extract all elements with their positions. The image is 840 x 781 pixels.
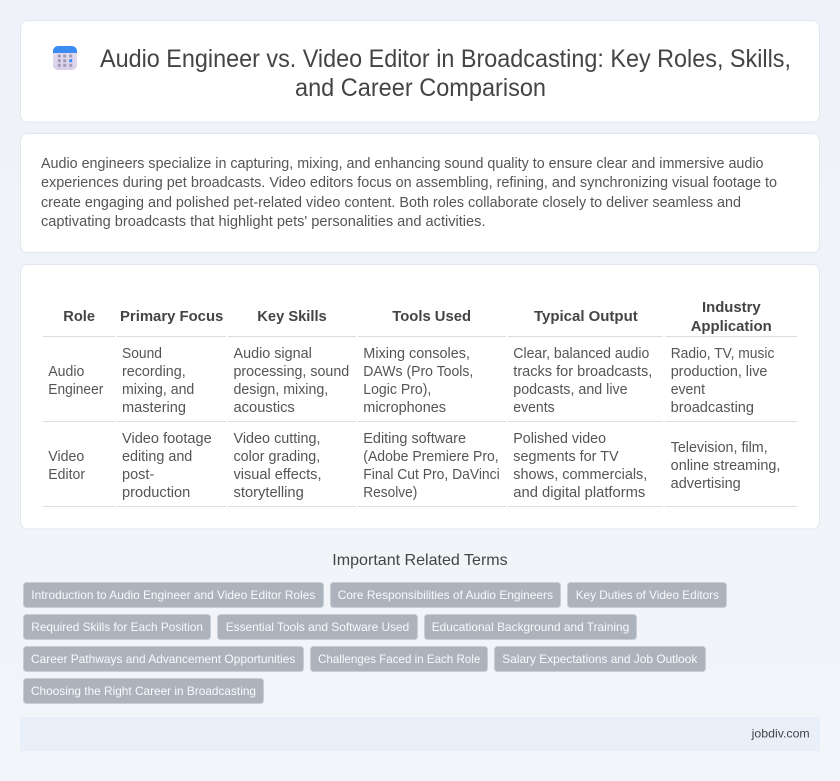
table row: audio engineer: events bbox=[513, 400, 555, 416]
table row: audio engineer: event bbox=[671, 382, 705, 398]
table row: audio engineer: production, live bbox=[671, 364, 767, 380]
icon: calendar bbox=[53, 46, 77, 70]
table row: video editor: visual effects, bbox=[234, 467, 322, 483]
table row: audio engineer: Logic Pro), bbox=[363, 382, 431, 398]
table row: video editor: segments for TV bbox=[513, 449, 619, 465]
table row: video editor: editing and bbox=[122, 449, 192, 465]
tag bbox=[494, 646, 706, 672]
table row: audio engineer: Engineer bbox=[48, 382, 103, 398]
table header row: Tools Used bbox=[392, 308, 471, 325]
panel: introduction bbox=[20, 134, 820, 252]
tag bbox=[24, 582, 324, 608]
table row: video editor: (Adobe Premiere Pro, bbox=[363, 449, 499, 465]
tag: Educational Background and Training bbox=[432, 620, 629, 634]
table row: video editor: advertising bbox=[671, 476, 741, 492]
table row: audio engineer: Mixing consoles, bbox=[363, 346, 470, 362]
table row: audio engineer: mixing, and bbox=[122, 382, 194, 398]
table row: audio engineer: podcasts, and live bbox=[513, 382, 628, 398]
table row: audio engineer: tracks for broadcasts, bbox=[513, 364, 652, 380]
table row: video editor: color grading, bbox=[234, 449, 320, 465]
intro paragraph: experiences during pet broadcasts. Video editors focus on assembling, refining, and synchronizing visual footage to bbox=[41, 175, 777, 191]
intro paragraph: Audio engineers specialize in capturing, mixing, and enhancing sound quality to ensure clear and immersive audio bbox=[41, 156, 764, 172]
table row: audio engineer: acoustics bbox=[234, 400, 295, 416]
table row: video editor: Resolve) bbox=[363, 485, 417, 501]
table header row: Key Skills bbox=[257, 308, 327, 325]
tag: Career Pathways and Advancement Opportunities bbox=[31, 652, 295, 666]
table row: video editor: Television, film, bbox=[671, 440, 768, 456]
table row: video editor bbox=[48, 431, 780, 501]
table row: video editor: Editing software bbox=[363, 431, 466, 447]
table header row: Application bbox=[691, 318, 772, 335]
table row: audio engineer: Clear, balanced audio bbox=[513, 346, 649, 362]
table row: audio engineer: DAWs (Pro Tools, bbox=[363, 364, 473, 380]
table row: audio engineer: Radio, TV, music bbox=[671, 346, 774, 362]
tag bbox=[218, 614, 418, 640]
table row: video editor: Editor bbox=[48, 467, 85, 483]
title: and Career Comparison bbox=[295, 74, 546, 102]
table row: video editor: Final Cut Pro, DaVinci bbox=[363, 467, 500, 483]
tag: Salary Expectations and Job Outlook bbox=[502, 652, 698, 666]
tag: Introduction to Audio Engineer and Video Editor Roles bbox=[31, 588, 315, 602]
title: Audio Engineer vs. Video Editor in Broadcasting: Key Roles, Skills, bbox=[100, 45, 791, 73]
table row: video editor: production bbox=[122, 485, 190, 501]
footer bar bbox=[20, 717, 820, 751]
table header row: Industry bbox=[702, 299, 761, 316]
table row: audio engineer: mastering bbox=[122, 400, 186, 416]
table row: video editor: shows, commercials, bbox=[513, 467, 647, 483]
table row: video editor: post- bbox=[122, 467, 155, 483]
related term tags bbox=[24, 582, 726, 704]
tag: Choosing the Right Career in Broadcasting bbox=[31, 684, 256, 698]
table row: audio engineer: Sound bbox=[122, 346, 162, 362]
table row: audio engineer: design, mixing, bbox=[234, 382, 328, 398]
table row: audio engineer: processing, sound bbox=[234, 364, 349, 380]
intro paragraph: create engaging and polished pet-related video content. Both roles collaborate closely to deliver seamless and bbox=[41, 195, 741, 211]
intro paragraph bbox=[41, 156, 777, 230]
tag bbox=[24, 678, 264, 704]
table row: audio engineer bbox=[48, 346, 774, 416]
tag bbox=[330, 582, 560, 608]
tag bbox=[24, 646, 304, 672]
tag bbox=[24, 614, 210, 640]
tag: Key Duties of Video Editors bbox=[576, 588, 719, 602]
tag: Essential Tools and Software Used bbox=[226, 620, 409, 634]
table row: video editor: Video bbox=[48, 449, 84, 465]
table row: video editor: Polished video bbox=[513, 431, 606, 447]
table header row: Primary Focus bbox=[120, 308, 223, 325]
table row: audio engineer: recording, bbox=[122, 364, 186, 380]
table header row: Typical Output bbox=[534, 308, 638, 325]
heading: important related terms: Important Related Terms bbox=[332, 552, 508, 569]
table row: audio engineer: Audio signal bbox=[234, 346, 312, 362]
table row: video editor: storytelling bbox=[234, 485, 304, 501]
table row: audio engineer: broadcasting bbox=[671, 400, 754, 416]
tag bbox=[424, 614, 636, 640]
table row: video editor: Video cutting, bbox=[234, 431, 320, 447]
tag: Challenges Faced in Each Role bbox=[318, 652, 481, 666]
panel: comparison table bbox=[20, 264, 820, 529]
tag bbox=[568, 582, 726, 608]
tag: Core Responsibilities of Audio Engineers bbox=[338, 588, 553, 602]
table row: video editor: and digital platforms bbox=[513, 485, 645, 501]
table row: video editor: online streaming, bbox=[671, 458, 780, 474]
table header row bbox=[63, 299, 772, 335]
table row: video editor: Video footage bbox=[122, 431, 212, 447]
table row: audio engineer: Audio bbox=[48, 364, 84, 380]
panel: title header bbox=[20, 20, 820, 122]
intro paragraph: captivating broadcasts that highlight pets' personalities and activities. bbox=[41, 214, 486, 230]
tag bbox=[310, 646, 488, 672]
tag: Required Skills for Each Position bbox=[31, 620, 203, 634]
footer bar: jobdiv.com bbox=[751, 726, 810, 740]
title bbox=[100, 45, 791, 102]
table row: audio engineer: microphones bbox=[363, 400, 446, 416]
table header row: Role bbox=[63, 308, 95, 325]
